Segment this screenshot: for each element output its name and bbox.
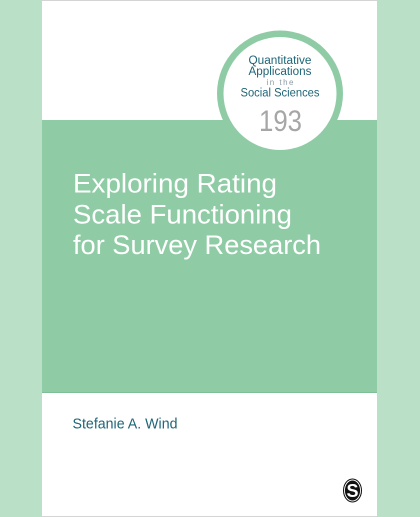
badge ring	[217, 30, 343, 156]
title: Scale Functioning	[73, 200, 292, 230]
series name	[240, 55, 320, 100]
title	[73, 168, 321, 260]
series badge	[217, 30, 343, 156]
icon: publisher logo	[343, 478, 362, 502]
series name: in the	[266, 78, 294, 87]
author: Stefanie A. Wind	[72, 416, 178, 432]
panel: white book cover	[42, 0, 377, 516]
title: for Survey Research	[73, 230, 321, 260]
series name: Applications	[248, 66, 312, 78]
panel: green title band	[42, 120, 377, 392]
icon: publisher logo: S	[346, 481, 359, 501]
series name: Social Sciences	[240, 88, 320, 100]
series number: 193	[259, 105, 302, 138]
badge inner circle	[224, 37, 336, 150]
title: Exploring Rating	[73, 168, 277, 198]
series name: Quantitative	[248, 55, 312, 67]
